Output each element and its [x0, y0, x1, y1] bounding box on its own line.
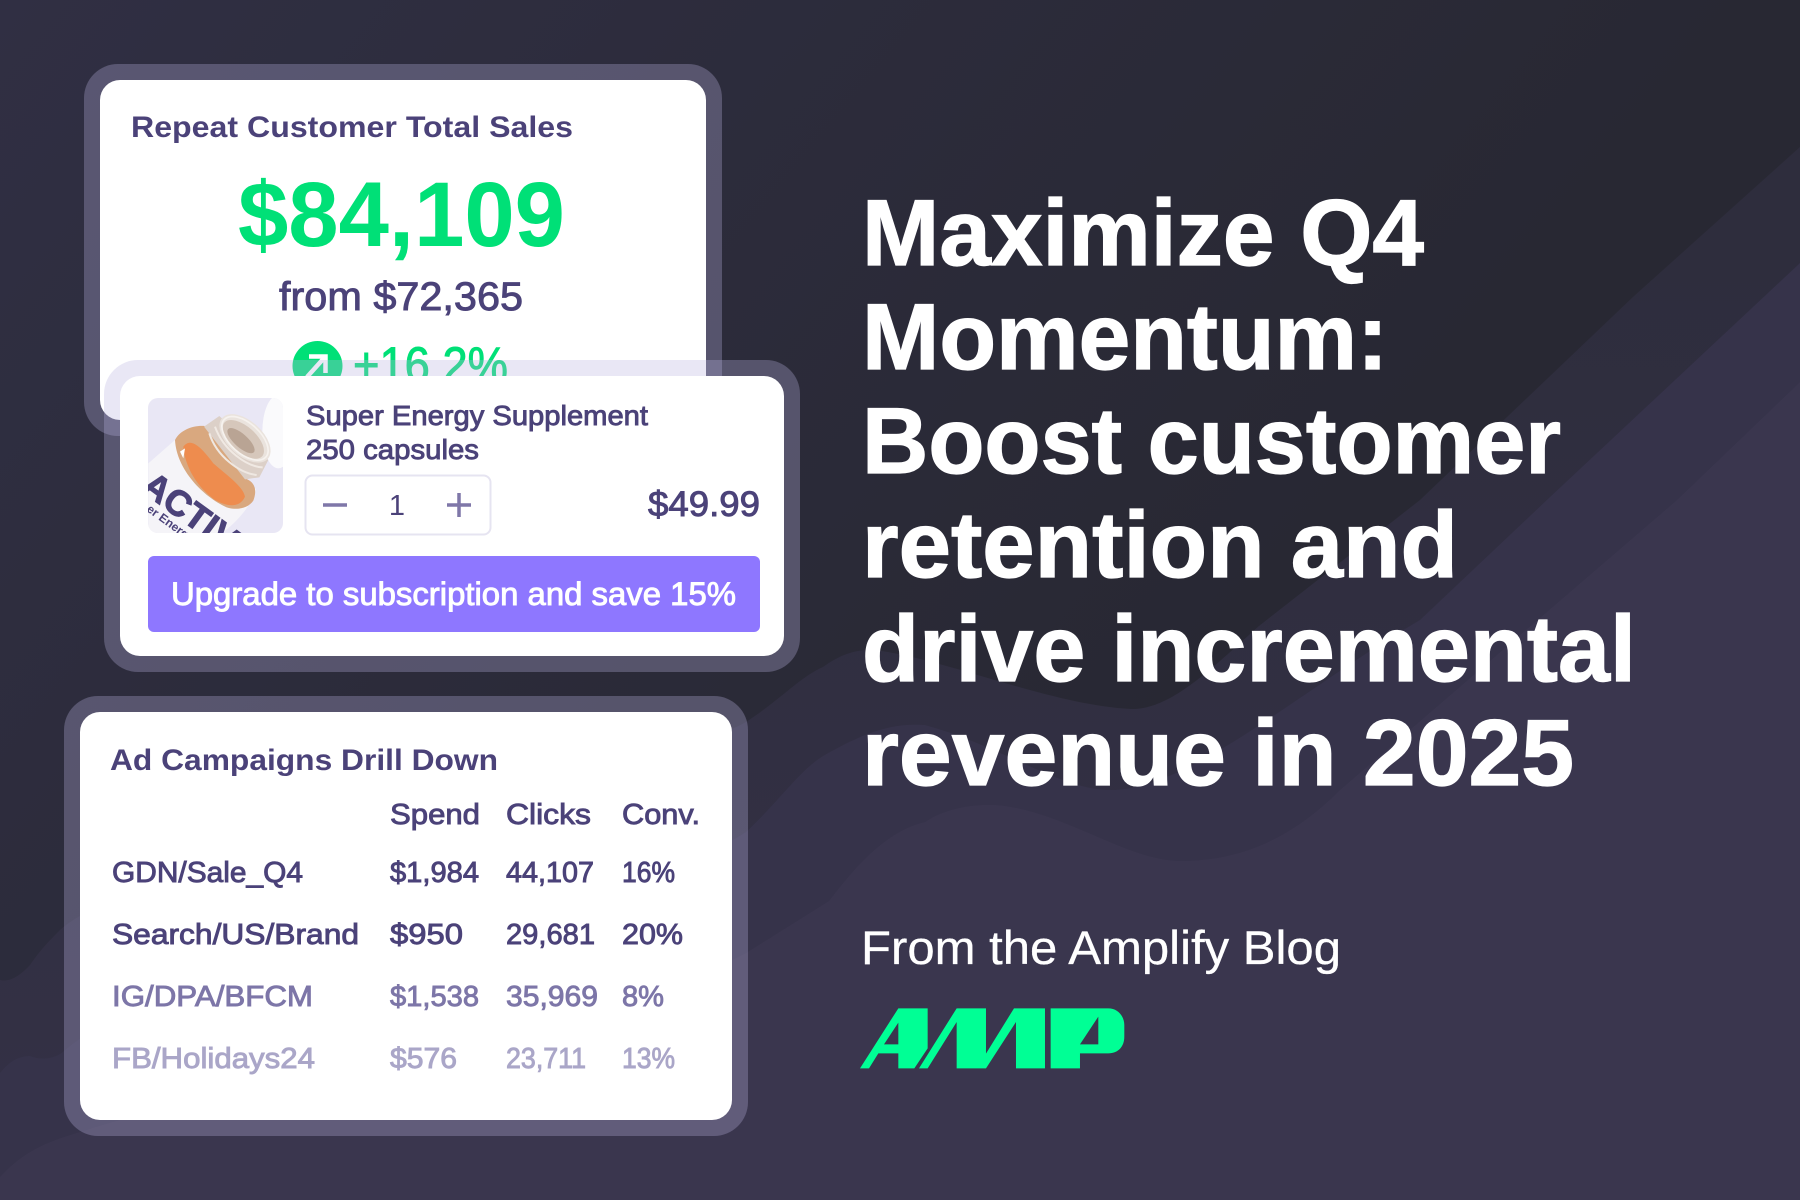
table row: IG/DPA/BFCM: $1,538: [390, 981, 479, 1013]
heading: repeat customer total sales: Repeat Customer Total Sales: [131, 111, 573, 144]
panel: repeat customer total sales: [84, 64, 722, 436]
metric: growth percentage: +16.2%: [353, 337, 508, 393]
icon: minus: [323, 503, 347, 507]
text: product name: Super Energy Supplement: [306, 400, 648, 431]
table header: [390, 799, 700, 831]
title: Maximize Q4: [862, 180, 1424, 285]
title: [862, 180, 1636, 805]
panel: ad campaigns drill down: [64, 696, 748, 1136]
logo: AMP: [860, 1008, 1124, 1068]
table row: FB/Holidays24: [112, 1043, 675, 1075]
table row: FB/Holidays24: $576: [390, 1043, 457, 1075]
title: retention and: [862, 492, 1458, 597]
table row: IG/DPA/BFCM: 35,969: [506, 981, 598, 1013]
quantity stepper: [306, 476, 490, 534]
table header: Conv.: [622, 799, 700, 831]
table row: GDN/Sale_Q4: [112, 857, 675, 889]
table row: FB/Holidays24: 23,711: [506, 1043, 586, 1075]
text: bottle small label: er Energy: [144, 502, 197, 546]
image: supplement bottle: [148, 398, 283, 533]
title: drive incremental: [862, 596, 1636, 701]
table row: GDN/Sale_Q4: $1,984: [390, 857, 479, 889]
table row: Search/US/Brand: $950: [390, 919, 463, 951]
heading: ad campaigns drill down: Ad Campaigns Drill Down: [110, 744, 498, 777]
text: from the amplify blog: From the Amplify Blog: [861, 921, 1341, 974]
button: upgrade to subscription: Upgrade to subscription and save 15%: [171, 576, 736, 612]
table row: Search/US/Brand: 20%: [622, 919, 683, 951]
table row: GDN/Sale_Q4: GDN/Sale_Q4: [112, 857, 303, 889]
table row: IG/DPA/BFCM: 8%: [622, 981, 664, 1013]
table row: Search/US/Brand: [112, 919, 683, 951]
table row: GDN/Sale_Q4: 44,107: [506, 857, 594, 889]
text: product size: 250 capsules: [306, 434, 479, 465]
title: Momentum:: [862, 284, 1388, 389]
button: upgrade to subscription: [148, 556, 760, 632]
table header: Spend: [390, 799, 480, 831]
icon: plus: [447, 493, 471, 517]
table row: Search/US/Brand: Search/US/Brand: [112, 919, 359, 951]
title: revenue in 2025: [862, 700, 1574, 805]
title: Boost customer: [862, 388, 1561, 493]
metric: total sales: $84,109: [238, 164, 565, 266]
icon: up arrow badge: [292, 341, 342, 391]
text: price: $49.99: [648, 485, 760, 524]
table row: Search/US/Brand: 29,681: [506, 919, 595, 951]
table row: IG/DPA/BFCM: IG/DPA/BFCM: [112, 981, 313, 1013]
table row: FB/Holidays24: FB/Holidays24: [112, 1043, 315, 1075]
table row: FB/Holidays24: 13%: [622, 1043, 675, 1075]
panel: product upsell: [104, 360, 800, 672]
table row: IG/DPA/BFCM: [112, 981, 664, 1013]
text: quantity: 1: [389, 490, 405, 522]
table row: GDN/Sale_Q4: 16%: [622, 857, 675, 889]
text: prior value: from $72,365: [279, 275, 523, 319]
text: bottle label: ACTIV: [135, 463, 246, 560]
table header: Clicks: [506, 799, 591, 831]
